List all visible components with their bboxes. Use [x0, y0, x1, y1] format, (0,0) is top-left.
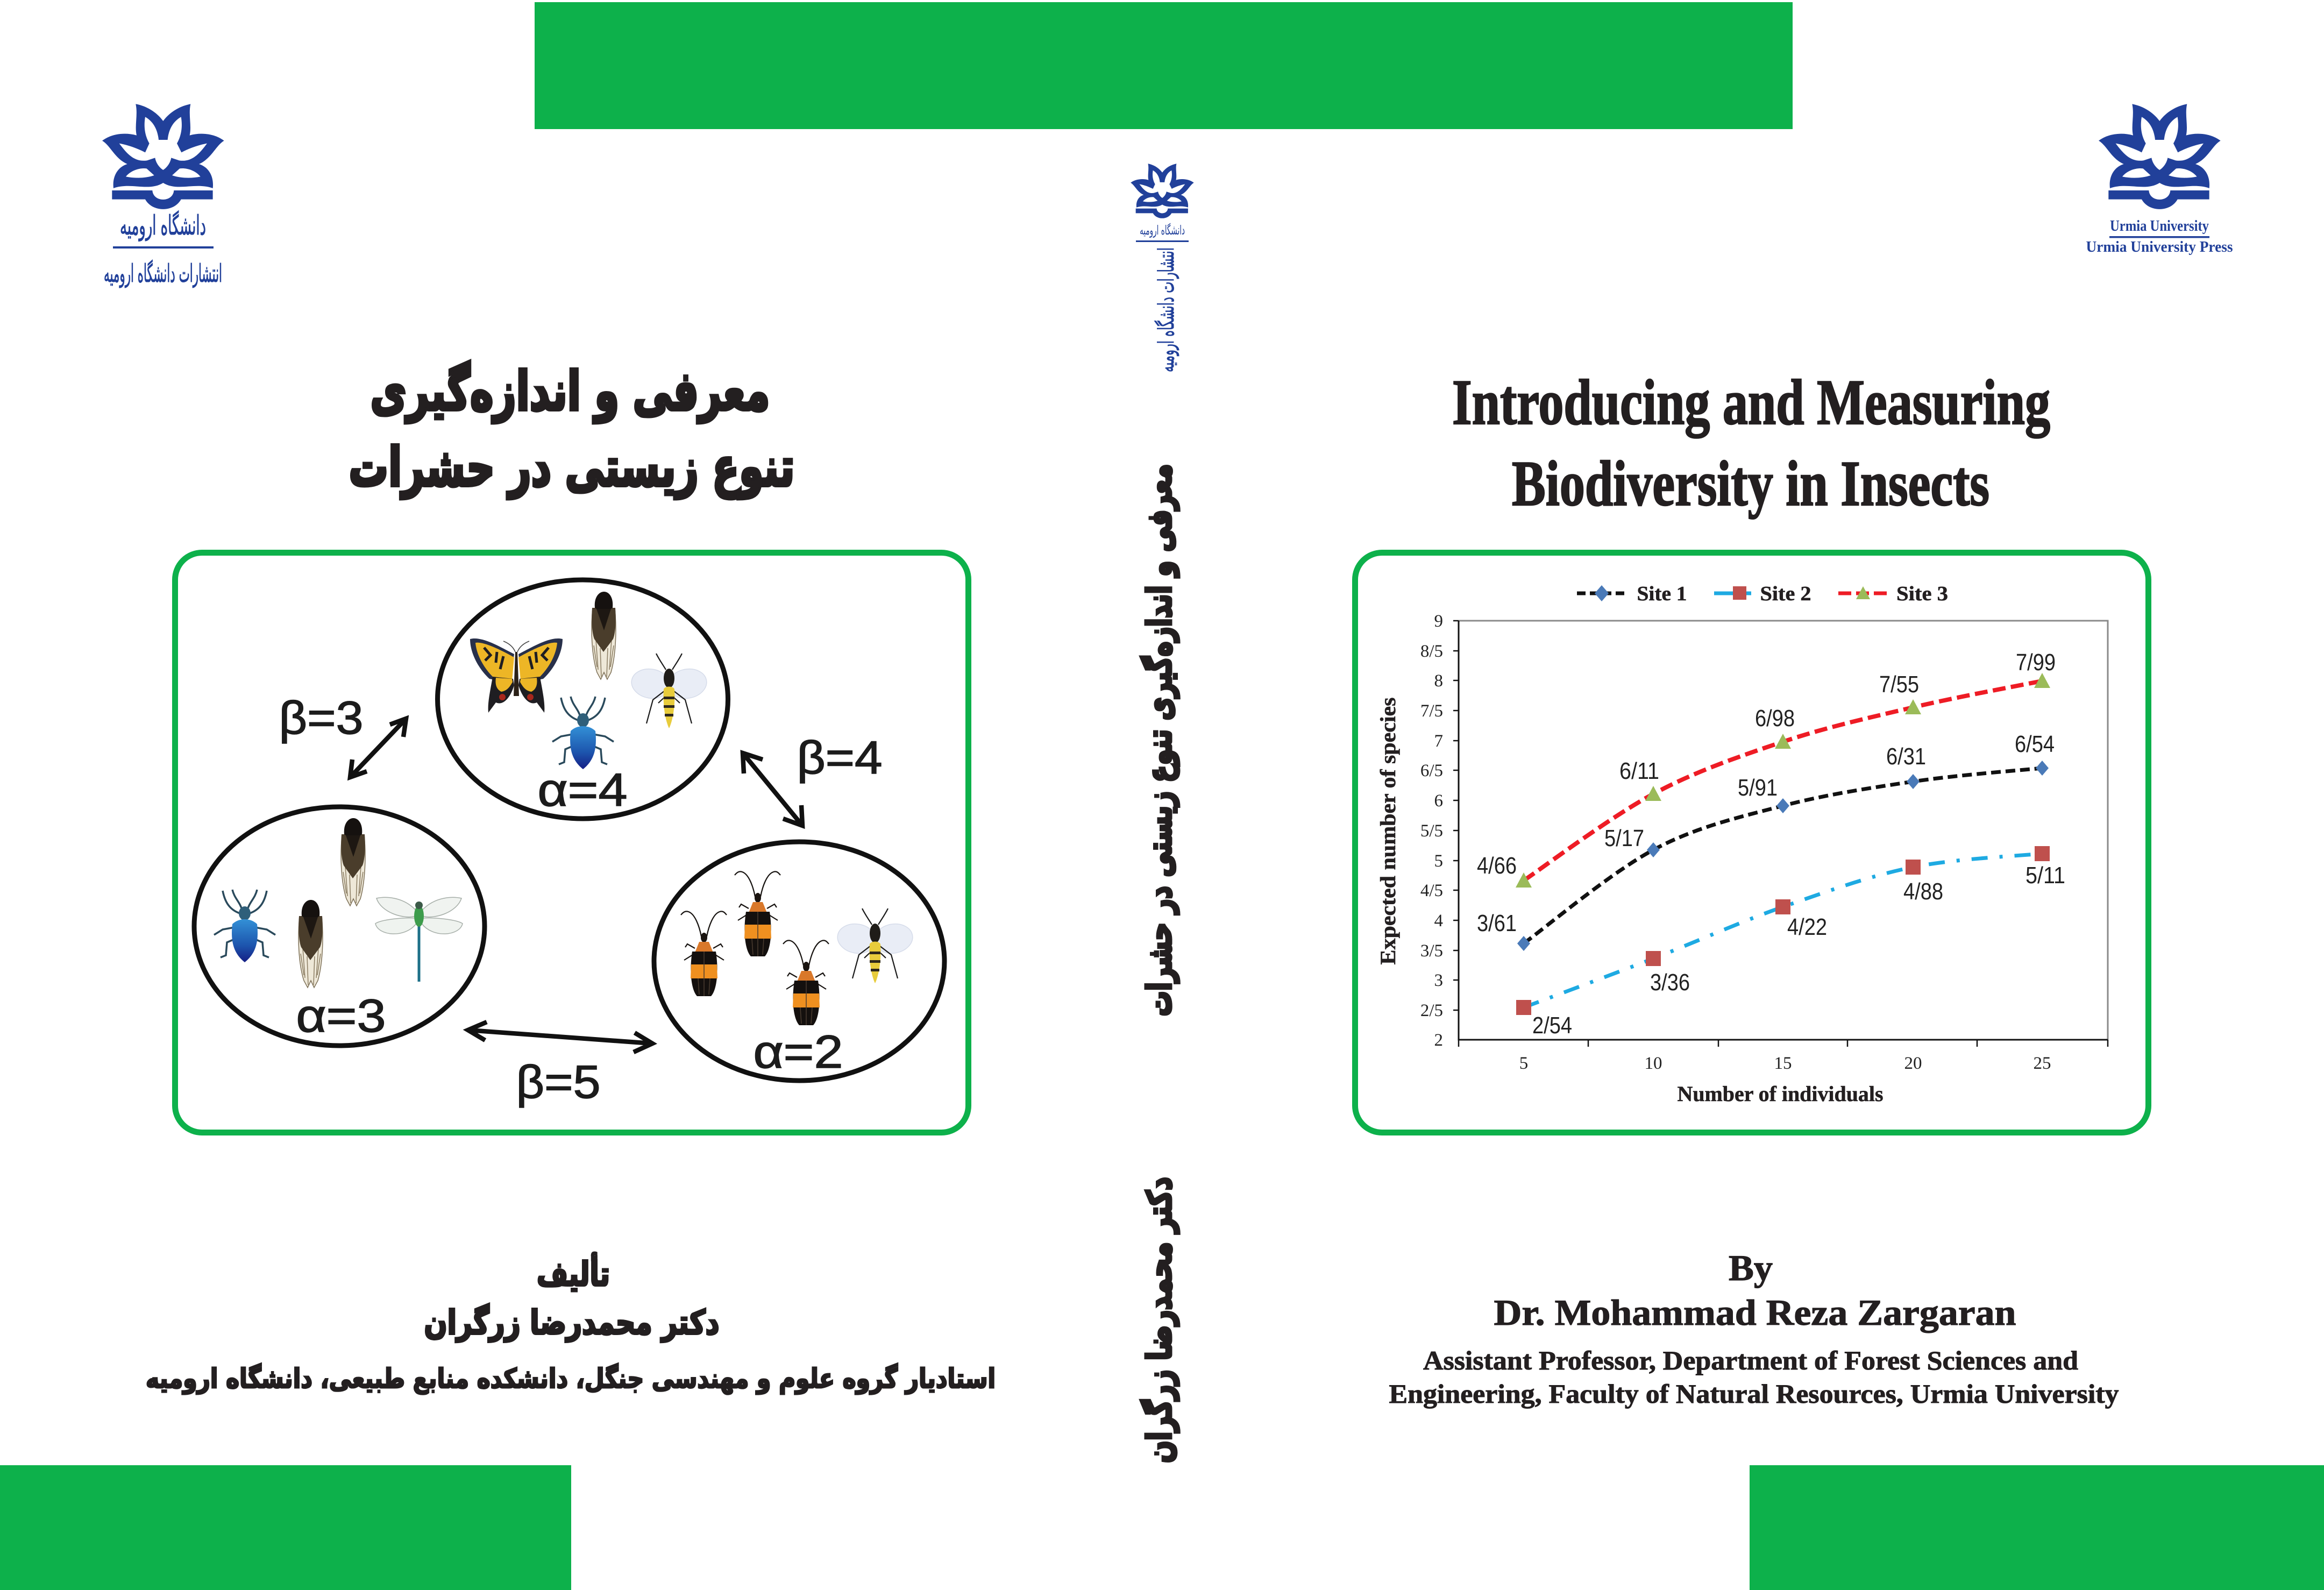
y axis tick labels: 4/5 — [1420, 881, 1443, 900]
title: English — [1452, 366, 2050, 519]
series: Site 2: 5/11 — [2025, 862, 2065, 889]
y axis tick labels: 2 — [1434, 1031, 1443, 1050]
arrow beta 5 — [468, 1022, 652, 1052]
top green bar — [535, 2, 1793, 129]
series: Site 2: 2/54 — [1532, 1012, 1572, 1039]
author block: Persian — [146, 1252, 996, 1395]
community circle top — [438, 580, 728, 819]
logo: Urmia University Persian, back cover — [102, 104, 224, 288]
series: Site 1: 6/31 — [1886, 743, 1926, 770]
logo: Urmia University English, front cover — [2086, 104, 2233, 255]
y axis tick labels: 5 — [1434, 851, 1443, 871]
community circle right — [654, 842, 944, 1081]
logo: spine: انتشارات دانشگاه ارومیه — [1154, 247, 1179, 372]
community circle top: α=4 — [538, 764, 627, 816]
series: Site 2: 4/88 — [1903, 878, 1943, 905]
y axis title: Expected number of species — [1376, 697, 1400, 965]
y axis tick labels: 2/5 — [1420, 1001, 1443, 1020]
series: Site 2 — [1516, 846, 2065, 1039]
y axis tick labels: 4 — [1434, 911, 1443, 931]
x axis title: Number of individuals — [1677, 1082, 1884, 1106]
series: Site 3: 6/11 — [1619, 758, 1659, 784]
series: Site 1 — [1477, 731, 2055, 951]
panel: rarefaction chart — [1355, 553, 2148, 1133]
series: Site 1: 5/17 — [1604, 825, 1644, 851]
x axis tick labels — [1519, 1054, 2051, 1073]
x axis tick labels: 15 — [1774, 1054, 1792, 1073]
y axis tick labels: 7/5 — [1420, 701, 1443, 721]
y axis tick labels: 5/5 — [1420, 821, 1443, 841]
book cover: انتشارات دانشگاه ارومیه — [104, 259, 222, 288]
spine author: دکتر محمدرضا زرگران — [1140, 1177, 1179, 1463]
series: Site 1: 5/91 — [1738, 775, 1778, 801]
spine title: معرفی و اندازه‌گیری تنوع زیستی در حشرات — [1140, 464, 1179, 1017]
author block: English: Assistant Professor, Department of Forest Sciences and — [1423, 1345, 2078, 1375]
author block: English: Engineering, Faculty of Natural Resources, Urmia University — [1389, 1379, 2119, 1409]
community circle right: α=2 — [753, 1026, 843, 1078]
legend: Site 2 — [1760, 583, 1811, 605]
y axis tick labels: 8/5 — [1420, 642, 1443, 661]
y axis tick labels: 9 — [1434, 612, 1443, 631]
x axis tick labels: 20 — [1904, 1054, 1922, 1073]
series: Site 1: 6/54 — [2015, 731, 2055, 757]
legend: Site 3 — [1896, 583, 1948, 605]
series: Site 3: 4/66 — [1477, 853, 1517, 879]
arrow beta 3 — [350, 719, 406, 777]
legend — [1577, 583, 1948, 605]
logo: Urmia University English, front cover: Urmia University Press — [2086, 238, 2233, 255]
logo: Urmia University English, front cover: Urmia University — [2110, 218, 2209, 235]
series: Site 3: 7/99 — [2016, 649, 2056, 676]
author block: English: Dr. Mohammad Reza Zargaran — [1494, 1292, 2016, 1333]
logo: Urmia University Persian, back cover: دانشگاه ارومیه — [120, 210, 206, 242]
title: English: Introducing and Measuring — [1452, 366, 2050, 438]
series: Site 1: 3/61 — [1477, 910, 1517, 936]
community circle left — [194, 807, 485, 1046]
bottom right green bar — [1750, 1465, 2324, 1590]
x axis tick labels: 10 — [1645, 1054, 1662, 1073]
panel: biodiversity diagram — [175, 553, 968, 1133]
title: Persian: تنوع زیستی در حشرات — [349, 436, 795, 499]
series: Site 3: 6/98 — [1755, 705, 1795, 732]
author block: English: By — [1729, 1247, 1773, 1288]
logo: spine — [1131, 164, 1194, 372]
series: Site 2: 3/36 — [1650, 969, 1690, 996]
community circle left: α=3 — [296, 990, 386, 1042]
y axis tick labels: 6/5 — [1420, 761, 1443, 780]
series: Site 2: 4/22 — [1787, 914, 1827, 940]
arrow beta 4 — [743, 753, 802, 826]
logo: spine: دانشگاه ارومیه — [1140, 223, 1185, 238]
series: Site 3: 7/55 — [1879, 671, 1919, 698]
series: Site 3 — [1477, 649, 2056, 888]
plot frame — [1453, 621, 2108, 1047]
y axis tick labels: 8 — [1434, 671, 1443, 691]
beta label 3: β=3 — [279, 692, 364, 744]
author block: Persian: استادیار گروه علوم و مهندسی جنگل، دانشکده منابع طبیعی، دانشگاه ارومیه — [146, 1363, 996, 1395]
y axis tick labels: 7 — [1434, 732, 1443, 751]
y axis tick labels — [1420, 612, 1443, 1050]
title: English: Biodiversity in Insects — [1512, 448, 1989, 519]
bottom left green bar — [0, 1465, 571, 1590]
author block: Persian: تألیف — [537, 1252, 610, 1294]
y axis tick labels: 6 — [1434, 791, 1443, 811]
x axis tick labels: 5 — [1519, 1054, 1528, 1073]
author block: Persian: دکتر محمدرضا زرگران — [424, 1303, 720, 1342]
author block: English — [1389, 1247, 2119, 1409]
title: Persian: معرفی و اندازه‌گیری — [370, 360, 770, 423]
legend: Site 1 — [1637, 583, 1687, 605]
x axis tick labels: 25 — [2033, 1054, 2051, 1073]
beta label 4: β=4 — [797, 732, 882, 784]
beta label 5: β=5 — [516, 1056, 600, 1108]
y axis tick labels: 3/5 — [1420, 941, 1443, 961]
title: Persian — [349, 360, 795, 499]
y axis tick labels: 3 — [1434, 971, 1443, 990]
